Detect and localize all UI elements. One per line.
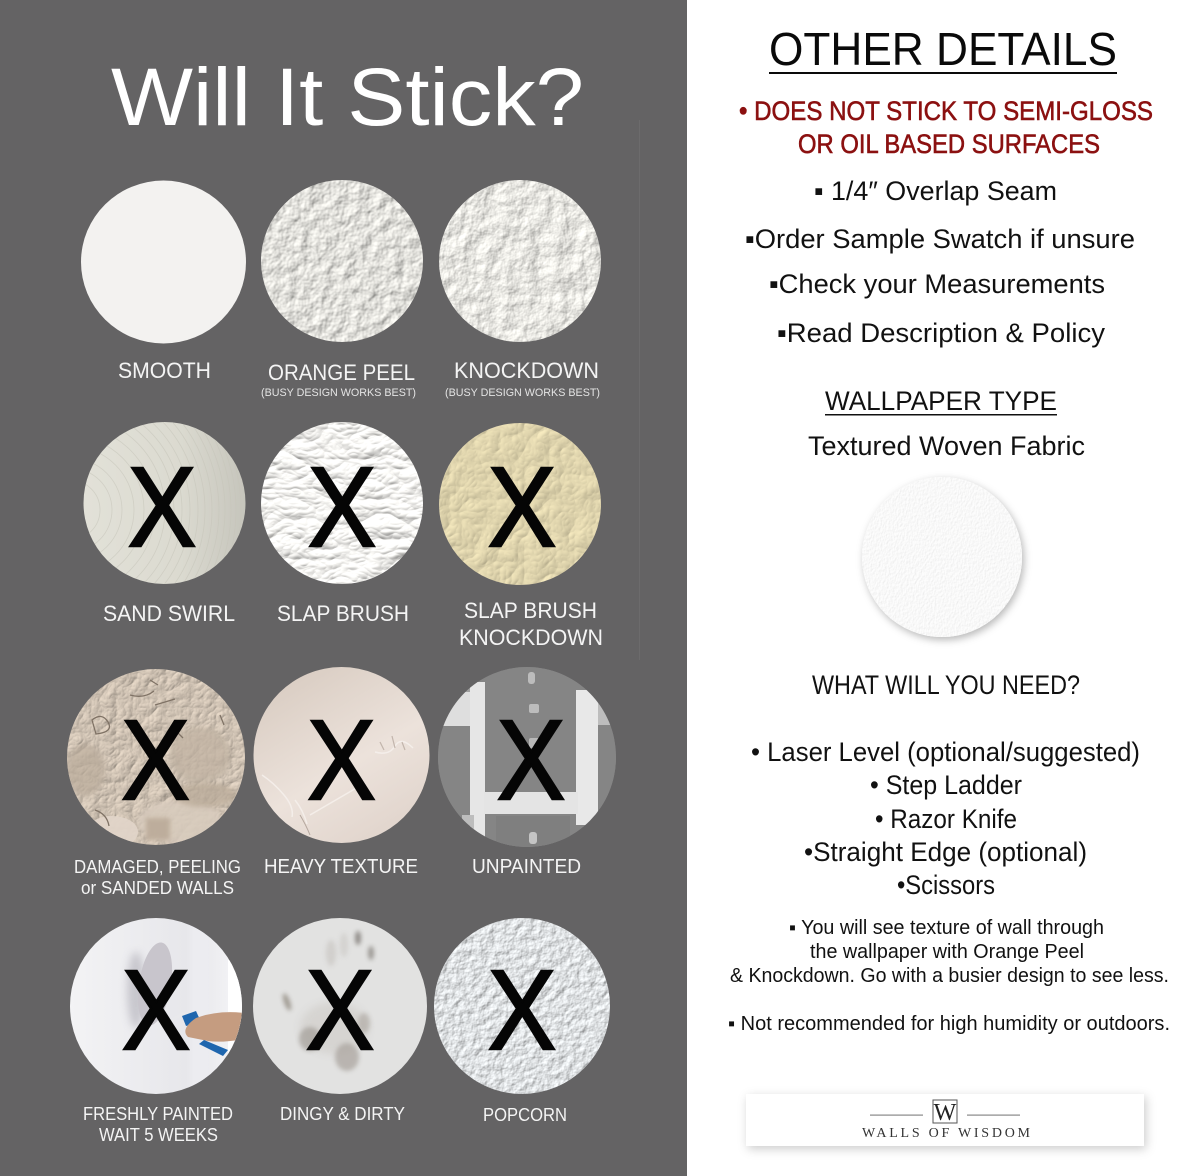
detail list: ▪ 1/4″ Overlap Seam: [814, 176, 1057, 206]
swatch: slap brush: [261, 422, 423, 626]
mark: x: X: [308, 444, 376, 570]
swatch: popcorn: [434, 918, 610, 1125]
label: slap brush knockdown: SLAP BRUSH: [464, 598, 597, 623]
logo: walls of wisdom: W: [934, 1100, 957, 1126]
swatch: unpainted: [438, 667, 616, 878]
heading: wallpaper type: WALLPAPER TYPE: [825, 386, 1057, 416]
logo: walls of wisdom: [746, 1094, 1144, 1146]
mark: x: X: [306, 947, 374, 1073]
label: unpainted: UNPAINTED: [472, 856, 581, 878]
heading: what will you need: WHAT WILL YOU NEED?: [812, 670, 1080, 700]
swatch: knockdown: [439, 180, 601, 399]
mark: x: X: [488, 947, 556, 1073]
mark: x: X: [488, 444, 556, 570]
warning: surfaces: OR OIL BASED SURFACES: [798, 129, 1100, 159]
detail list: ▪Read Description & Policy: [777, 318, 1105, 348]
label: smooth: SMOOTH: [118, 358, 211, 383]
label: slap brush knockdown: [459, 598, 603, 650]
note: orange peel: (BUSY DESIGN WORKS BEST): [261, 387, 416, 399]
note: texture visibility: & Knockdown. Go with a busier design to see less.: [730, 965, 1169, 987]
note: humidity: ▪ Not recommended for high humidity or outdoors.: [728, 1013, 1170, 1035]
label: popcorn: POPCORN: [483, 1105, 567, 1125]
list: tools: • Laser Level (optional/suggested): [751, 737, 1140, 767]
label: heavy texture: HEAVY TEXTURE: [264, 856, 418, 878]
note: knockdown: (BUSY DESIGN WORKS BEST): [445, 387, 600, 399]
logo: walls of wisdom: WALLS OF WISDOM: [862, 1126, 1031, 1141]
list: tools: •Straight Edge (optional): [804, 837, 1087, 867]
swatch: dingy and dirty: [253, 918, 427, 1124]
mark: x: X: [122, 947, 190, 1073]
swatch: woven fabric: [862, 477, 1022, 637]
list: tools: [751, 737, 1140, 900]
label: freshly painted: [83, 1104, 233, 1145]
label: damaged walls: [74, 857, 241, 898]
mark: x: X: [308, 697, 376, 823]
swatch: heavy texture: [254, 667, 430, 878]
note: texture visibility: [730, 917, 1169, 987]
swatch: slap brush knockdown: [439, 423, 603, 650]
mark: x: X: [128, 444, 196, 570]
list: tools: • Step Ladder: [870, 770, 1022, 800]
warning: surfaces: • DOES NOT STICK TO SEMI-GLOSS: [739, 96, 1153, 126]
title: Will It Stick?: [111, 52, 584, 143]
label: damaged walls: DAMAGED, PEELING: [74, 857, 241, 877]
panel: other details: [728, 23, 1170, 1146]
heading: other details: OTHER DETAILS: [769, 23, 1117, 75]
label: damaged walls: or SANDED WALLS: [81, 878, 234, 898]
label: orange peel: ORANGE PEEL: [268, 360, 415, 385]
warning: surfaces: [739, 96, 1153, 159]
list: tools: •Scissors: [897, 870, 995, 900]
note: texture visibility: the wallpaper with Orange Peel: [810, 941, 1084, 963]
detail list: [745, 176, 1135, 348]
label: knockdown: KNOCKDOWN: [454, 358, 599, 383]
mark: x: X: [497, 697, 565, 823]
label: freshly painted: WAIT 5 WEEKS: [99, 1125, 218, 1145]
label: slap brush: SLAP BRUSH: [277, 601, 409, 626]
text: wallpaper type value: Textured Woven Fabric: [808, 431, 1085, 461]
note: texture visibility: ▪ You will see texture of wall through: [789, 917, 1104, 939]
label: slap brush knockdown: KNOCKDOWN: [459, 625, 603, 650]
swatch: damaged walls: [65, 669, 245, 898]
swatch: smooth: [81, 180, 246, 383]
swatch: orange peel: [261, 180, 423, 399]
list: tools: • Razor Knife: [875, 804, 1017, 834]
detail list: ▪Check your Measurements: [769, 269, 1105, 299]
panel: will it stick: [0, 0, 687, 1176]
label: sand swirl: SAND SWIRL: [103, 601, 235, 626]
swatch: freshly painted: [70, 918, 244, 1145]
detail list: ▪Order Sample Swatch if unsure: [745, 224, 1135, 254]
mark: x: X: [122, 697, 190, 823]
label: freshly painted: FRESHLY PAINTED: [83, 1104, 233, 1124]
swatch: sand swirl: [84, 422, 246, 621]
label: dingy and dirty: DINGY & DIRTY: [280, 1104, 405, 1124]
